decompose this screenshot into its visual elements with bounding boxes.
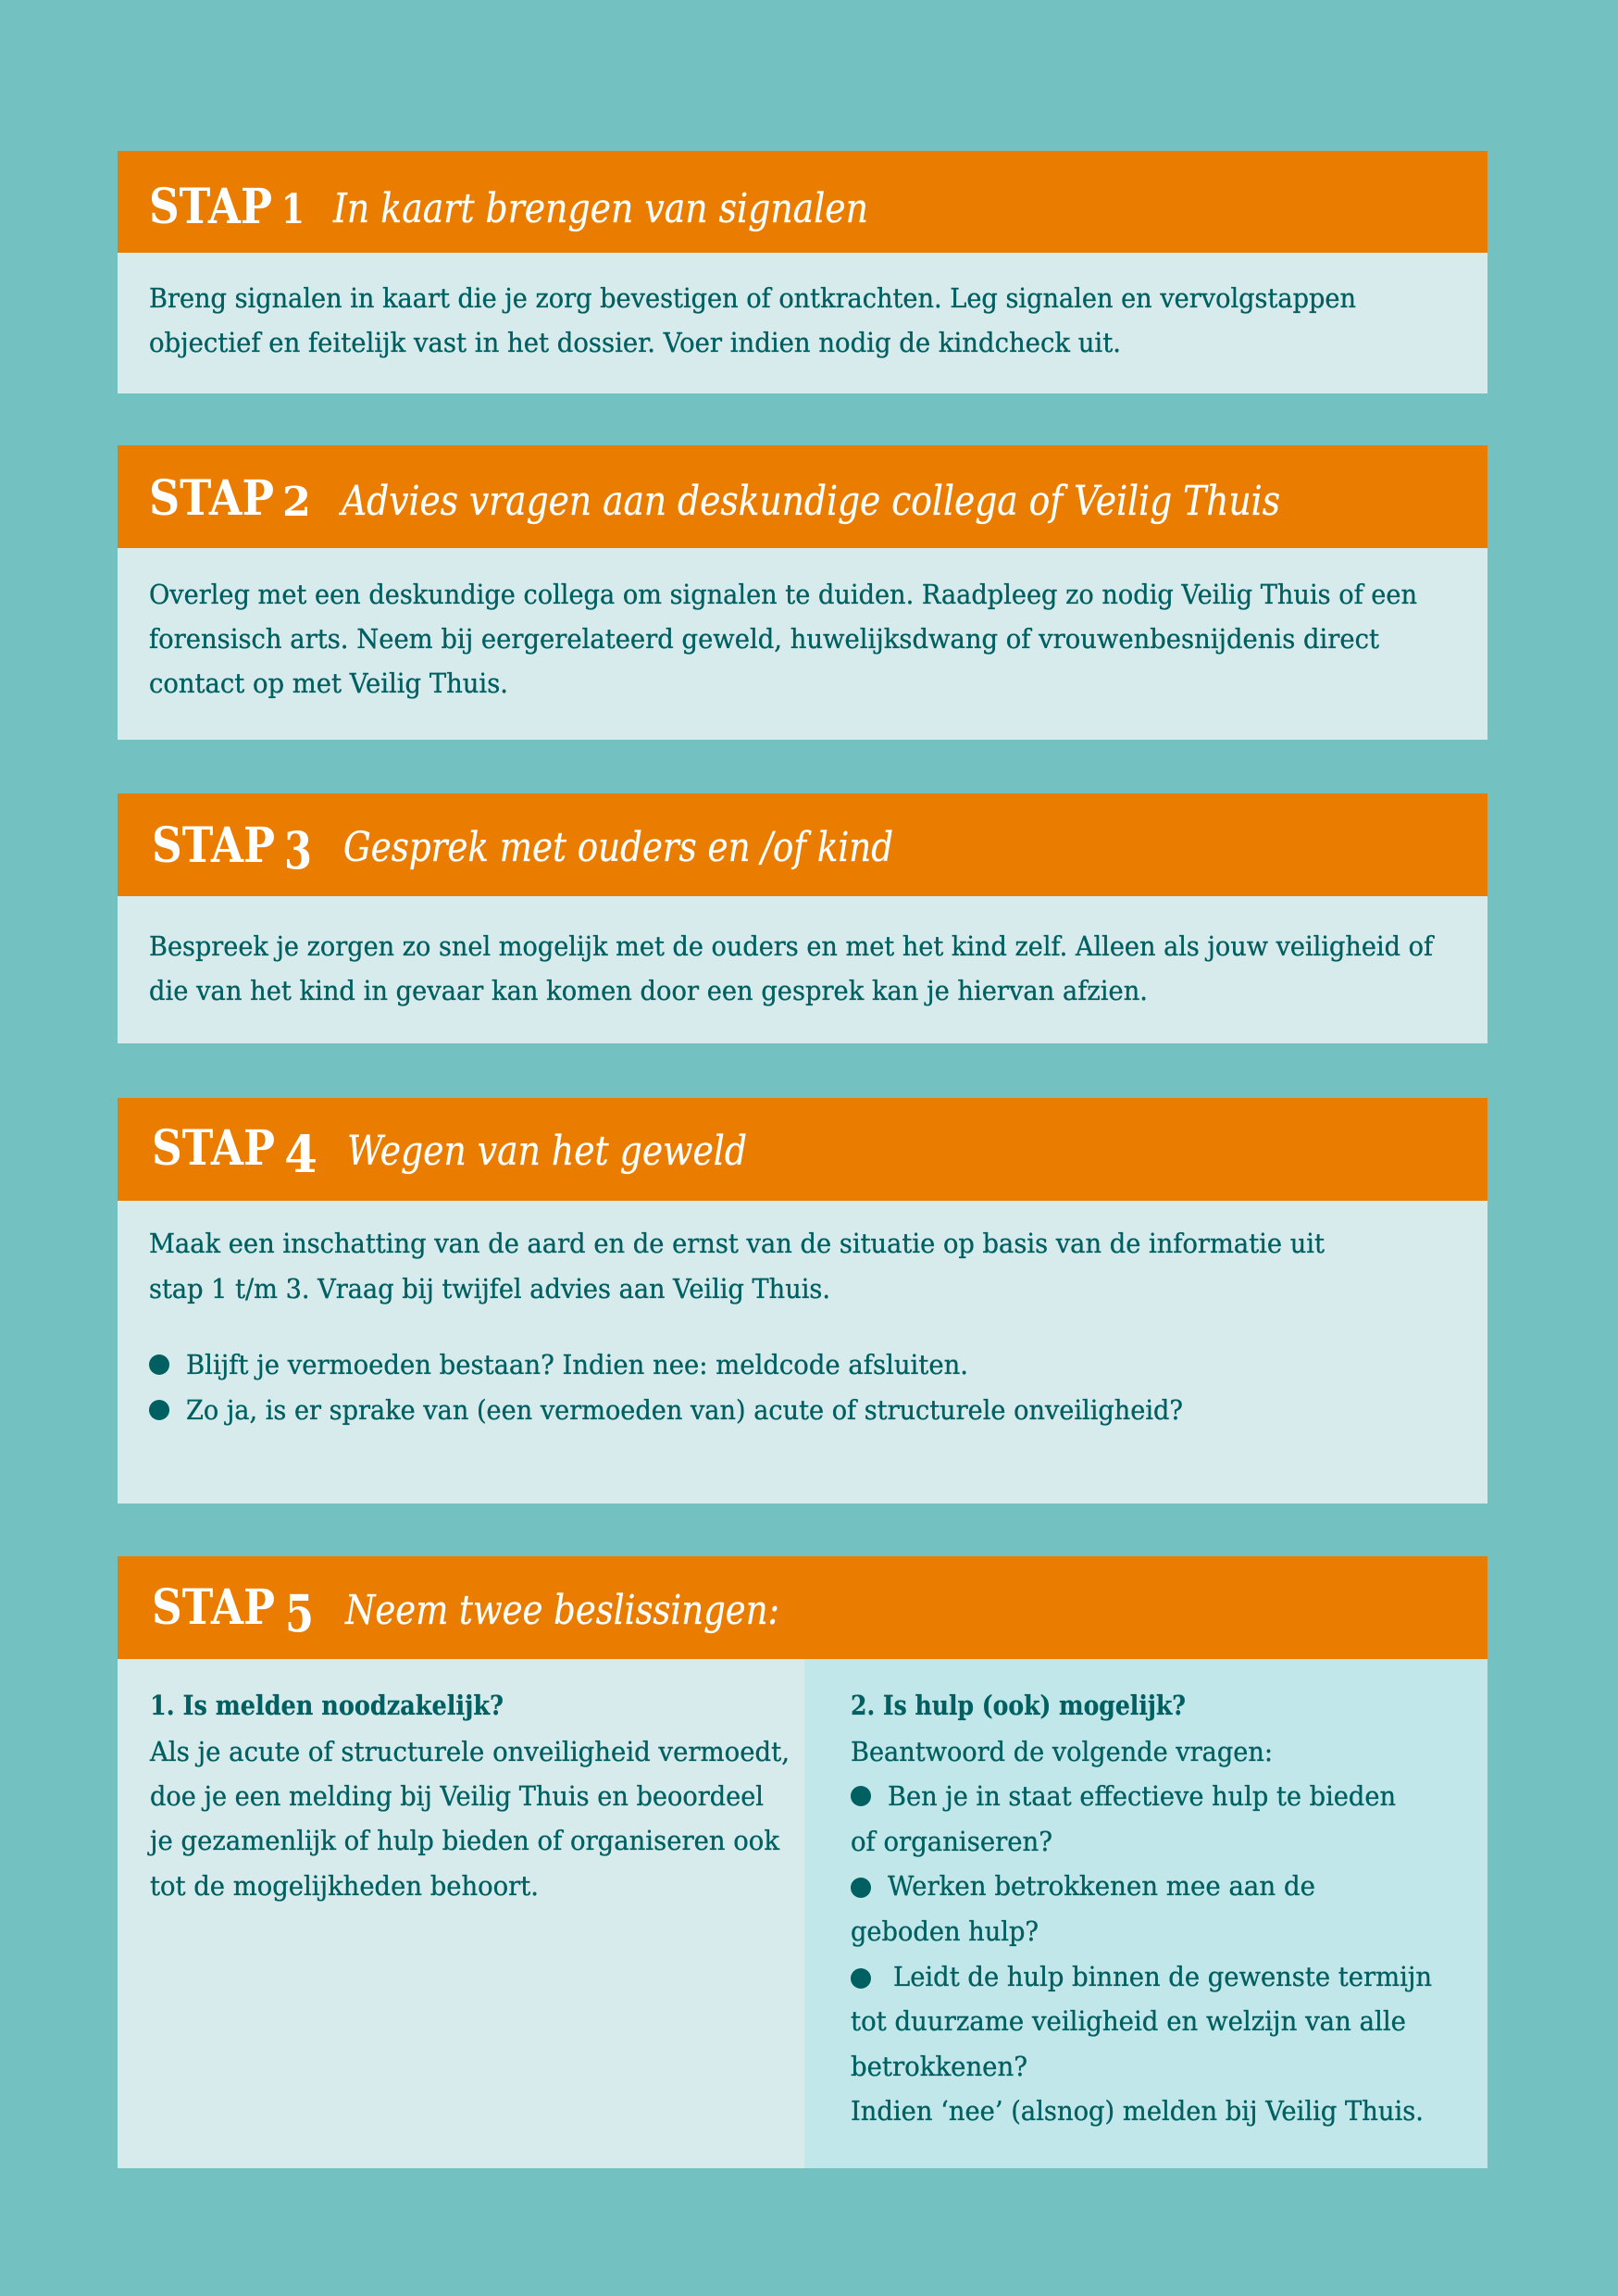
header: stap 5: Neem twee beslissingen: [344,1587,779,1634]
column: beslissing 2: of organiseren? [851,1827,1052,1857]
panel: stap 5 [118,1556,1487,2168]
body text: stap 2: forensisch arts. Neem bij eergerelateerd geweld, huwelijksdwang of vrouwenbesnijdenis direct [149,624,1380,655]
body text: stap 1 [149,283,1356,358]
column: beslissing 2: Leidt de hulp binnen de gewenste termijn [893,1962,1432,1992]
header: stap 3 [118,793,1487,896]
header: stap 1 [118,151,1487,253]
column: beslissing 2: Werken betrokkenen mee aan de [888,1871,1315,1902]
header: stap 3: STAP [152,817,275,874]
body text: stap 4: stap 1 t/m 3. Vraag bij twijfel advies aan Veilig Thuis. [149,1274,830,1304]
body text: stap 2 [149,580,1417,699]
header: stap 2 [118,445,1487,548]
panel: stap 4 [118,1098,1487,1504]
bullet list: stap 4: Blijft je vermoeden bestaan? Indien nee: meldcode afsluiten. [186,1350,968,1380]
panel: stap 1 [118,151,1487,393]
header: stap 1: In kaart brengen van signalen [332,185,868,232]
column: beslissing 2: 2. Is hulp (ook) mogelijk? [851,1690,1186,1721]
panel: stap 3 [118,793,1487,1043]
column: beslissing 2: Beantwoord de volgende vragen: [851,1737,1273,1767]
body text: stap 1: Breng signalen in kaart die je zorg bevestigen of ontkrachten. Leg signalen en vervolgstappen [149,283,1356,314]
column: beslissing 1: je gezamenlijk of hulp bieden of organiseren ook [147,1826,780,1856]
body text: stap 4: Maak een inschatting van de aard en de ernst van de situatie op basis van de informatie uit [149,1229,1326,1259]
header: stap 5 [118,1556,1487,1659]
body text: stap 3: Bespreek je zorgen zo snel mogelijk met de ouders en met het kind zelf. Alleen als jouw veiligheid of [149,931,1435,962]
column: beslissing 1 [118,1659,804,2168]
column: beslissing 2: betrokkenen? [851,2052,1027,2082]
bullet list: stap 4 [149,1350,1183,1426]
header: stap 4 [118,1098,1487,1201]
bullet list: stap 4: Zo ja, is er sprake van (een vermoeden van) acute of structurele onveiligheid? [186,1395,1183,1426]
body text: stap 2: Overleg met een deskundige collega om signalen te duiden. Raadpleeg zo nodig Veilig Thuis of een [149,580,1417,610]
header: stap 2: Advies vragen aan deskundige collega of Veilig Thuis [339,478,1280,525]
body text: stap 3 [149,931,1435,1006]
column: beslissing 1: tot de mogelijkheden behoort. [150,1871,539,1902]
column: beslissing 2: tot duurzame veiligheid en welzijn van alle [851,2006,1406,2037]
body text: stap 1: objectief en feitelijk vast in het dossier. Voer indien nodig de kindcheck uit. [149,328,1121,358]
header: stap 4: Wegen van het geweld [347,1128,747,1175]
column: beslissing 2: Indien ‘nee’ (alsnog) melden bij Veilig Thuis. [851,2096,1424,2127]
header: stap 1: STAP [149,179,272,235]
column: beslissing 2: geboden hulp? [851,1916,1039,1947]
header: stap 3: 3 [284,820,312,880]
body text: stap 3: die van het kind in gevaar kan komen door een gesprek kan je hiervan afzien. [149,976,1148,1006]
body text: stap 2: contact op met Veilig Thuis. [149,668,508,699]
header: stap 4: 4 [284,1124,317,1184]
panel: stap 2 [118,445,1487,740]
column: beslissing 1: Als je acute of structurele onveiligheid vermoedt, [149,1737,790,1767]
header: stap 5: STAP [152,1579,275,1636]
header: stap 5: 5 [285,1583,314,1643]
column: beslissing 1: 1. Is melden noodzakelijk? [150,1690,504,1721]
header: stap 2: 2 [282,479,311,526]
header: stap 4: STAP [152,1120,275,1177]
header: stap 1: 1 [281,186,305,233]
header: stap 3: Gesprek met ouders en /of kind [343,824,893,871]
column: beslissing 2: Ben je in staat effectieve hulp te bieden [888,1781,1396,1812]
column: beslissing 1: doe je een melding bij Veilig Thuis en beoordeel [150,1781,764,1812]
body text: stap 4 [149,1229,1326,1304]
header: stap 2: STAP [149,470,274,527]
column: beslissing 2 [804,1659,1487,2168]
